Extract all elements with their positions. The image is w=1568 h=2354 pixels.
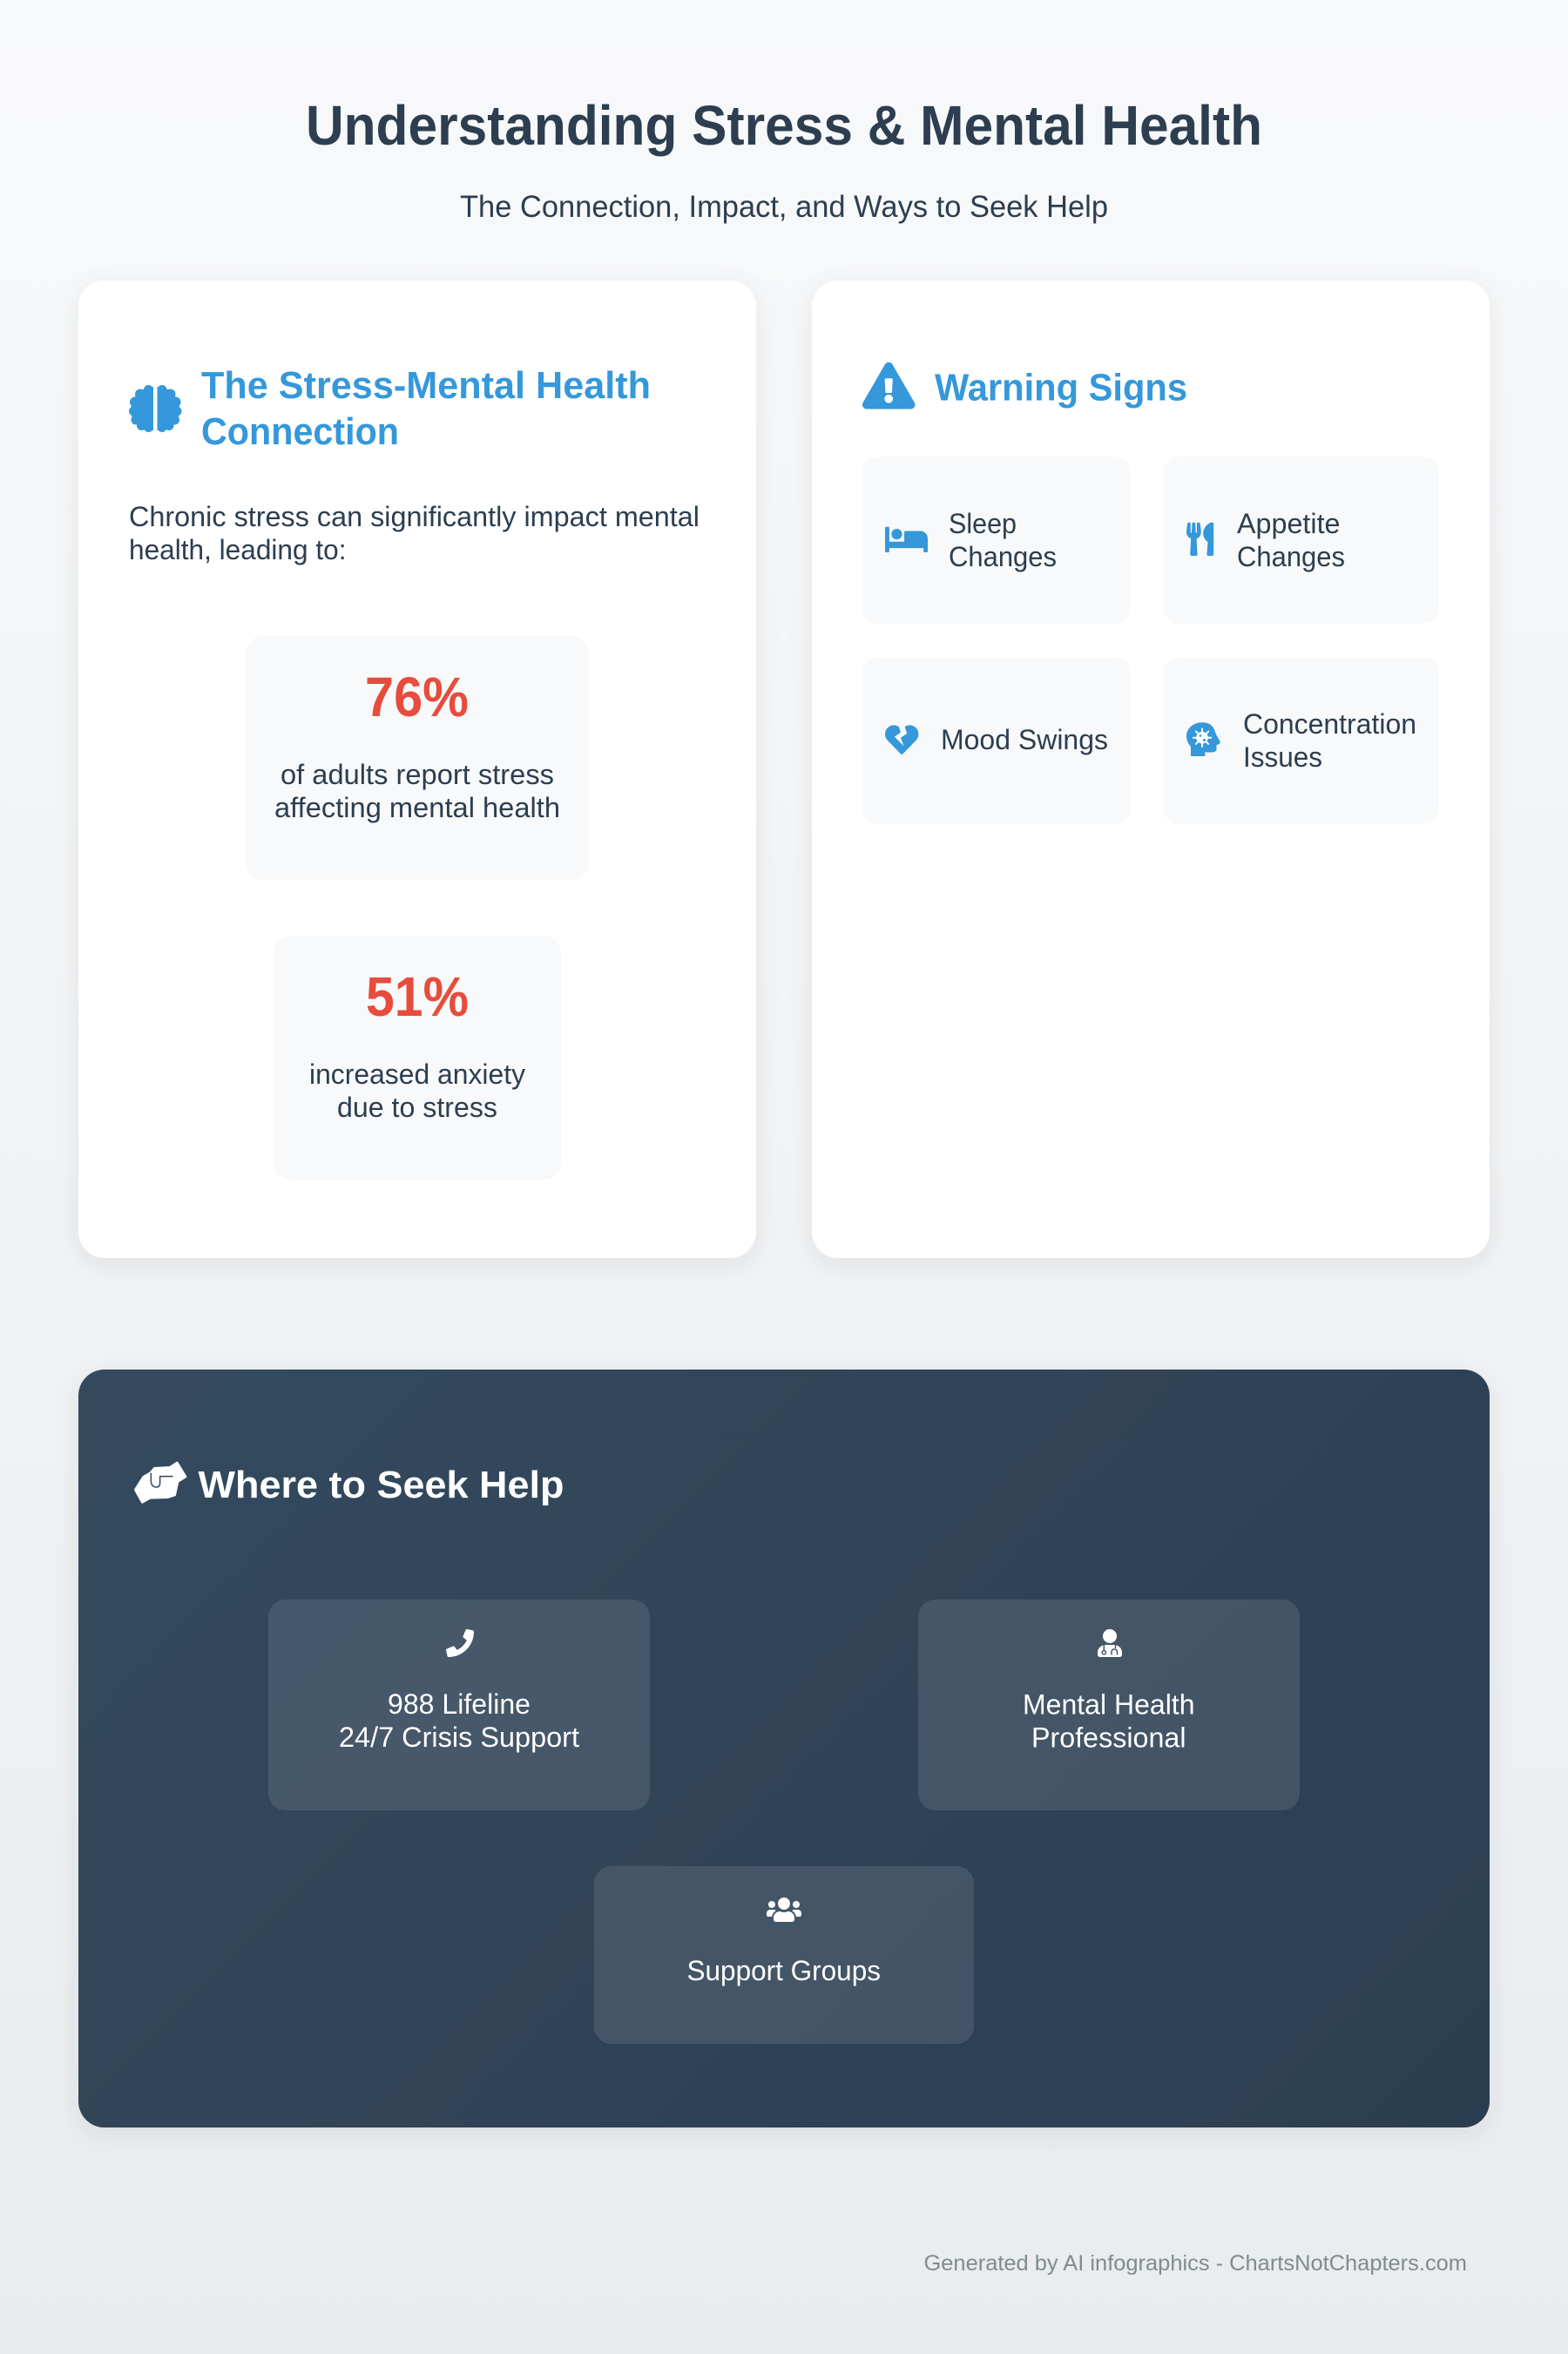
warning item: sleep changes	[862, 457, 1131, 624]
label: 988 lifeline	[339, 1688, 579, 1753]
label: 988 lifeline: 988 Lifeline	[388, 1688, 531, 1720]
icon: doctor	[1098, 1629, 1122, 1657]
stat label: 76%: affecting mental health	[274, 792, 560, 823]
help card: support groups	[594, 1866, 974, 2044]
text: chronic stress intro: health, leading to:	[129, 534, 347, 565]
warning item: concentration issues	[1164, 657, 1439, 824]
warning item: appetite changes	[1164, 457, 1439, 624]
stat card: 76%	[246, 636, 589, 880]
stat label: 76%: of adults report stress	[280, 759, 554, 790]
label: support groups: Support Groups	[686, 1955, 881, 1986]
label: mental health professional: Mental Health	[1023, 1688, 1195, 1720]
label: mental health professional	[1023, 1688, 1195, 1753]
label: appetite changes	[1237, 508, 1345, 572]
text: chronic stress intro: Chronic stress can significantly impact mental	[129, 501, 700, 532]
panel: the stress-mental health connection	[78, 281, 756, 1258]
label: sleep changes: Sleep	[949, 508, 1017, 539]
heading: where to seek help: Where to Seek Help	[199, 1464, 564, 1506]
icon: phone	[446, 1629, 474, 1657]
stat label: 51%	[309, 1059, 525, 1123]
icon: brain	[129, 385, 181, 432]
label: mood swings: Mood Swings	[941, 724, 1108, 755]
help card: 988 lifeline	[268, 1600, 650, 1810]
label: concentration issues	[1243, 708, 1416, 773]
stat value: 51%: 51%	[366, 965, 469, 1028]
subtitle: The Connection, Impact, and Ways to Seek Help	[460, 190, 1108, 224]
icon: warning triangle	[862, 362, 915, 409]
heading: warning signs: Warning Signs	[935, 366, 1187, 409]
label: sleep changes: Changes	[949, 541, 1057, 572]
heading: connection: The Stress-Mental Health	[201, 364, 651, 407]
icon: handshake	[135, 1463, 186, 1502]
heading: connection: Connection	[201, 410, 399, 453]
icon: utensils	[1186, 523, 1213, 556]
stat label: 51%: due to stress	[337, 1092, 497, 1123]
stat value: 76%: 76%	[365, 666, 469, 728]
icon: users	[767, 1897, 801, 1922]
title: Understanding Stress & Mental Health	[306, 94, 1262, 157]
help card: mental health professional	[918, 1600, 1300, 1810]
panel: warning signs	[812, 281, 1490, 1258]
label: mental health professional: Professional	[1031, 1722, 1186, 1753]
stat card: 51%	[274, 936, 561, 1180]
icon: bed	[885, 527, 928, 552]
icon: head with virus	[1186, 722, 1220, 756]
icon: broken heart	[885, 725, 918, 754]
label: appetite changes: Appetite	[1237, 508, 1340, 539]
label: concentration issues: Concentration	[1243, 708, 1416, 740]
text: chronic stress intro	[129, 501, 700, 565]
stat label: 76%	[274, 759, 560, 823]
heading: connection	[201, 364, 651, 453]
label: appetite changes: Changes	[1237, 541, 1345, 572]
panel: where to seek help	[78, 1370, 1490, 2127]
warning item: mood swings	[862, 657, 1131, 824]
label: sleep changes	[949, 508, 1057, 572]
footer credit: Generated by AI infographics - ChartsNotChapters.com	[923, 2251, 1467, 2276]
label: 988 lifeline: 24/7 Crisis Support	[339, 1722, 579, 1753]
stat label: 51%: increased anxiety	[309, 1059, 525, 1090]
label: concentration issues: Issues	[1243, 741, 1322, 773]
